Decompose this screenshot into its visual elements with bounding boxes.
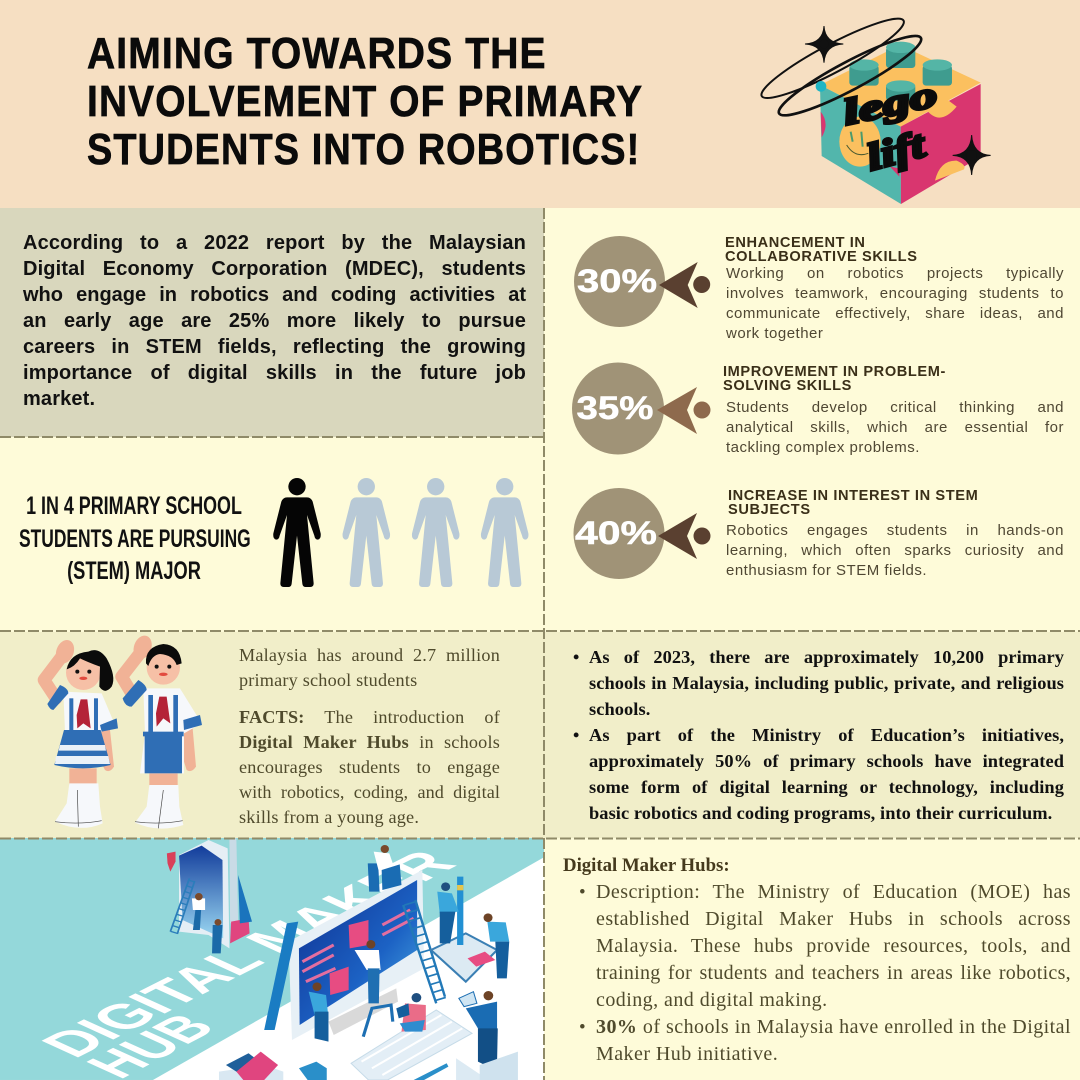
- title: AIMING TOWARDS THE: [87, 29, 547, 78]
- text: Digital Maker Hubs description: •: [579, 1017, 586, 1038]
- text: Malaysia primary students and facts: encourages students to engage: [239, 757, 500, 777]
- header band: [0, 0, 1080, 208]
- stat body: problem solving: tackling complex problems.: [726, 439, 920, 456]
- text: Digital Maker Hubs description: 30% of schools in Malaysia have enrolled in the Digital: [596, 1016, 1071, 1038]
- text: primary school bullet list: schools in Malaysia, including public, private, and religious: [589, 673, 1064, 693]
- seated person and tablet person: [401, 1003, 426, 1032]
- text: primary school bullet list: •: [573, 647, 579, 667]
- panel: MDEC report background: [0, 208, 544, 437]
- pictogram: 1 of 4 people highlighted: [273, 478, 528, 587]
- stat value: 35%: 35%: [577, 390, 653, 426]
- stat marker: 30%: [574, 236, 710, 327]
- panel: MDEC report text: who engage in robotics and coding activities at: [23, 284, 526, 306]
- illustration: two saluting students: [38, 636, 202, 829]
- boy: [122, 633, 202, 829]
- logo: lego lift block: lego: [839, 73, 941, 133]
- text: primary school bullet list: •: [573, 725, 579, 745]
- text: Malaysia primary students and facts: FACTS: The introduction of: [239, 707, 500, 727]
- panel: facts background: [0, 632, 1080, 838]
- text: Malaysia primary students and facts: with robotics, coding, and digital: [239, 782, 500, 802]
- panel: MDEC report text: careers in STEM fields, reflecting the growing: [23, 336, 526, 358]
- text: Digital Maker Hubs description: Malaysia. These hubs provide resources, tools, and: [596, 935, 1071, 957]
- text: Digital Maker Hubs description: established Digital Maker Hubs in schools across: [596, 908, 1071, 930]
- text: Digital Maker Hubs description: [563, 855, 1071, 1065]
- stat heading: problem solving: IMPROVEMENT IN PROBLEM-: [723, 364, 946, 380]
- monitor people: [355, 950, 381, 970]
- title: INVOLVEMENT OF PRIMARY: [87, 77, 643, 126]
- hub lettering: DIGITAL MAKER: [27, 843, 469, 1064]
- logo: lego lift block: lift: [862, 123, 931, 179]
- girl: [44, 637, 118, 828]
- pencil and floor plan: [431, 933, 497, 982]
- illustration: Digital Maker Hub: [0, 838, 544, 1080]
- text: primary school bullet list: schools.: [589, 699, 650, 719]
- stat heading: STEM interest: [728, 488, 978, 518]
- stat value: 30%: 30%: [577, 263, 657, 299]
- stat heading: collaborative skills: [725, 235, 918, 265]
- stat marker: 35%: [572, 362, 710, 454]
- stat heading: problem solving: SOLVING SKILLS: [723, 378, 852, 394]
- heading: 1 in 4 statistic: (STEM) MAJOR: [67, 557, 201, 585]
- stat body: collaborative skills: involves teamwork, encouraging students to: [726, 285, 1064, 302]
- heading: 1 in 4 statistic: [19, 492, 251, 585]
- text: primary school bullet list: As part of the Ministry of Education’s initiatives,: [589, 725, 1064, 745]
- stat heading: problem solving: [723, 364, 946, 394]
- text: primary school bullet list: [573, 647, 1064, 823]
- text: primary school bullet list: approximately 50% of primary schools have integrated: [589, 751, 1064, 771]
- stat body: STEM interest: [726, 522, 1064, 579]
- stat body: STEM interest: learning, which often sparks curiosity and: [726, 542, 1064, 559]
- text: Digital Maker Hubs description: coding, and digital making.: [596, 989, 828, 1011]
- stat heading: STEM interest: INCREASE IN INTEREST IN STEM: [728, 488, 978, 504]
- text: Malaysia primary students and facts: primary school students: [239, 670, 417, 690]
- stat body: STEM interest: Robotics engages students in hands-on: [726, 522, 1064, 539]
- stat heading: STEM interest: SUBJECTS: [728, 502, 811, 518]
- text: Malaysia primary students and facts: Malaysia has around 2.7 million: [239, 645, 500, 665]
- top person: [368, 863, 380, 892]
- stat heading: collaborative skills: COLLABORATIVE SKILLS: [725, 249, 918, 265]
- text: Malaysia primary students and facts: skills from a young age.: [239, 807, 419, 827]
- text: Digital Maker Hubs description: Maker Hub initiative.: [596, 1043, 778, 1065]
- panel: MDEC report text: an early age are 25% more likely to pursue: [23, 310, 526, 332]
- title: STUDENTS INTO ROBOTICS!: [87, 125, 640, 174]
- stat body: problem solving: Students develop critical thinking and: [726, 399, 1064, 416]
- text: primary school bullet list: As of 2023, there are approximately 10,200 primary: [589, 647, 1064, 667]
- stat body: collaborative skills: work together: [726, 325, 823, 342]
- phone tower: [179, 840, 229, 948]
- text: Digital Maker Hubs description: Digital Maker Hubs:: [563, 855, 730, 876]
- stat body: STEM interest: enthusiasm for STEM fields.: [726, 562, 927, 579]
- text: Malaysia primary students and facts: [239, 645, 500, 827]
- heading: 1 in 4 statistic: STUDENTS ARE PURSUING: [19, 524, 251, 552]
- stat body: problem solving: [726, 399, 1064, 456]
- stat body: collaborative skills: communicate effectively, share ideas, and: [726, 305, 1064, 322]
- panel: MDEC report text: market.: [23, 388, 95, 410]
- title: [87, 29, 643, 174]
- panel: MDEC report text: Digital Economy Corporation (MDEC), students: [23, 258, 526, 280]
- text: Digital Maker Hubs description: •: [579, 882, 586, 903]
- keyboard: [351, 1010, 472, 1080]
- panel: MDEC report text: importance of digital skills in the future job: [23, 362, 526, 384]
- stat marker: 40%: [574, 488, 710, 579]
- logo: lego lift block: [760, 18, 991, 204]
- binders and box: [219, 1065, 283, 1080]
- stat heading: collaborative skills: ENHANCEMENT IN: [725, 235, 866, 251]
- text: Malaysia primary students and facts: Digital Maker Hubs in schools: [239, 732, 500, 752]
- text: Digital Maker Hubs description: training for students and teachers in areas like robotics,: [596, 962, 1071, 984]
- panel: MDEC report text: [23, 232, 526, 410]
- stat body: collaborative skills: Working on robotics projects typically: [726, 265, 1064, 282]
- panel: MDEC report text: According to a 2022 report by the Malaysian: [23, 232, 526, 254]
- stat value: 40%: 40%: [575, 515, 657, 551]
- heading: 1 in 4 statistic: 1 IN 4 PRIMARY SCHOOL: [26, 492, 242, 520]
- text: Digital Maker Hubs description: Description: The Ministry of Education (MOE) has: [596, 881, 1071, 903]
- stat body: collaborative skills: [726, 265, 1064, 342]
- main monitor: [289, 870, 424, 1040]
- text: primary school bullet list: some form of digital learning or technology, including: [589, 777, 1064, 797]
- stat body: problem solving: analytical skills, which are essential for: [726, 419, 1064, 436]
- text: primary school bullet list: basic robotics and coding programs, into their curriculum.: [589, 803, 1052, 823]
